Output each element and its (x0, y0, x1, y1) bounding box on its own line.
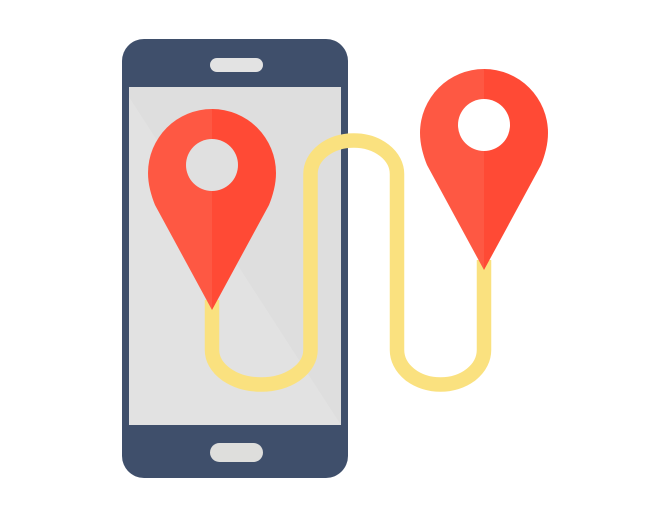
left pin hole (186, 139, 238, 191)
right map pin (420, 69, 548, 270)
phone screen (129, 87, 341, 425)
home button (210, 443, 263, 462)
phone (122, 39, 348, 478)
route path (212, 140, 484, 384)
phone body (122, 39, 348, 478)
left map pin (148, 109, 276, 310)
speaker (210, 58, 263, 72)
right pin hole (458, 99, 510, 151)
